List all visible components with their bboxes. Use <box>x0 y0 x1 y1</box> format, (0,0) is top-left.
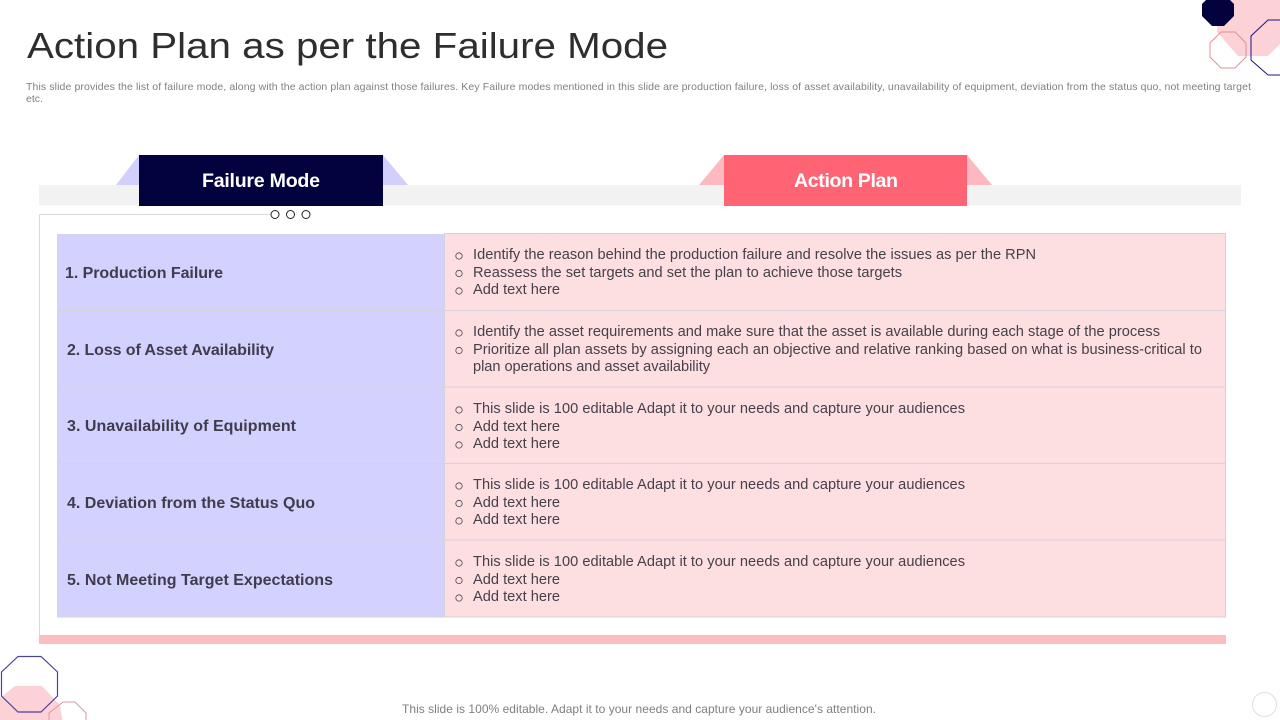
frame dots <box>271 210 310 218</box>
title: Action Plan as per the Failure Mode <box>27 25 668 66</box>
row 2: loss of asset availability: plan operations and asset availability <box>473 359 711 375</box>
row 2: loss of asset availability: 2. Loss of Asset Availability <box>67 342 274 359</box>
header band <box>39 185 1241 206</box>
header: failure mode: Failure Mode <box>202 170 320 192</box>
table frame <box>39 214 1226 644</box>
row 4: deviation from the status quo: This slide is 100 editable Adapt it to your needs and capture your audiences <box>473 477 965 493</box>
row 4: deviation from the status quo: Add text here <box>473 495 560 511</box>
description: etc. <box>26 93 43 105</box>
row 3: unavailability of equipment <box>67 401 965 452</box>
table <box>57 234 1226 617</box>
row 2: loss of asset availability: Prioritize all plan assets by assigning each an objective and relative ranking based on what is business-critical to <box>473 342 1202 358</box>
footer note: This slide is 100% editable. Adapt it to your needs and capture your audience's attention. <box>402 702 876 716</box>
row 1: production failure: Reassess the set targets and set the plan to achieve those targets <box>473 265 902 281</box>
row 4: deviation from the status quo: 4. Deviation from the Status Quo <box>67 495 315 512</box>
header: failure mode <box>116 155 408 206</box>
row 2: loss of asset availability: Identify the asset requirements and make sure that the asset is available during each stage of the process <box>473 324 1160 340</box>
description <box>26 81 1251 105</box>
row 3: unavailability of equipment: 3. Unavailability of Equipment <box>67 418 297 435</box>
header: action plan <box>699 155 992 206</box>
header: action plan: Action Plan <box>794 170 898 192</box>
row 1: production failure: 1. Production Failure <box>65 265 223 282</box>
row 5: not meeting target expectations: Add text here <box>473 589 560 605</box>
row 5: not meeting target expectations: 5. Not Meeting Target Expectations <box>67 572 333 589</box>
row 3: unavailability of equipment: This slide is 100 editable Adapt it to your needs and capture your audiences <box>473 401 965 417</box>
description: This slide provides the list of failure mode, along with the action plan against those failures. Key Failure modes mentioned in this slide are production failure, loss of asset availability, unavailability of equipment, deviation from the status quo, not meeting target <box>26 81 1251 93</box>
row 3: unavailability of equipment: Add text here <box>473 436 560 452</box>
row 3: unavailability of equipment: Add text here <box>473 419 560 435</box>
decoration: top right octagons <box>1202 0 1280 75</box>
row 1: production failure: Add text here <box>473 282 560 298</box>
row 4: deviation from the status quo: Add text here <box>473 512 560 528</box>
row 5: not meeting target expectations: Add text here <box>473 572 560 588</box>
decoration: bottom left octagons <box>0 656 86 720</box>
row 5: not meeting target expectations: This slide is 100 editable Adapt it to your needs and capture your audiences <box>473 554 965 570</box>
row 4: deviation from the status quo <box>67 477 965 528</box>
row 1: production failure <box>65 247 1036 298</box>
row 5: not meeting target expectations <box>67 554 965 605</box>
row 2: loss of asset availability <box>67 324 1202 375</box>
decoration: bottom right circle <box>1252 692 1276 716</box>
row 1: production failure: Identify the reason behind the production failure and resolve the issues as per the RPN <box>473 247 1036 263</box>
